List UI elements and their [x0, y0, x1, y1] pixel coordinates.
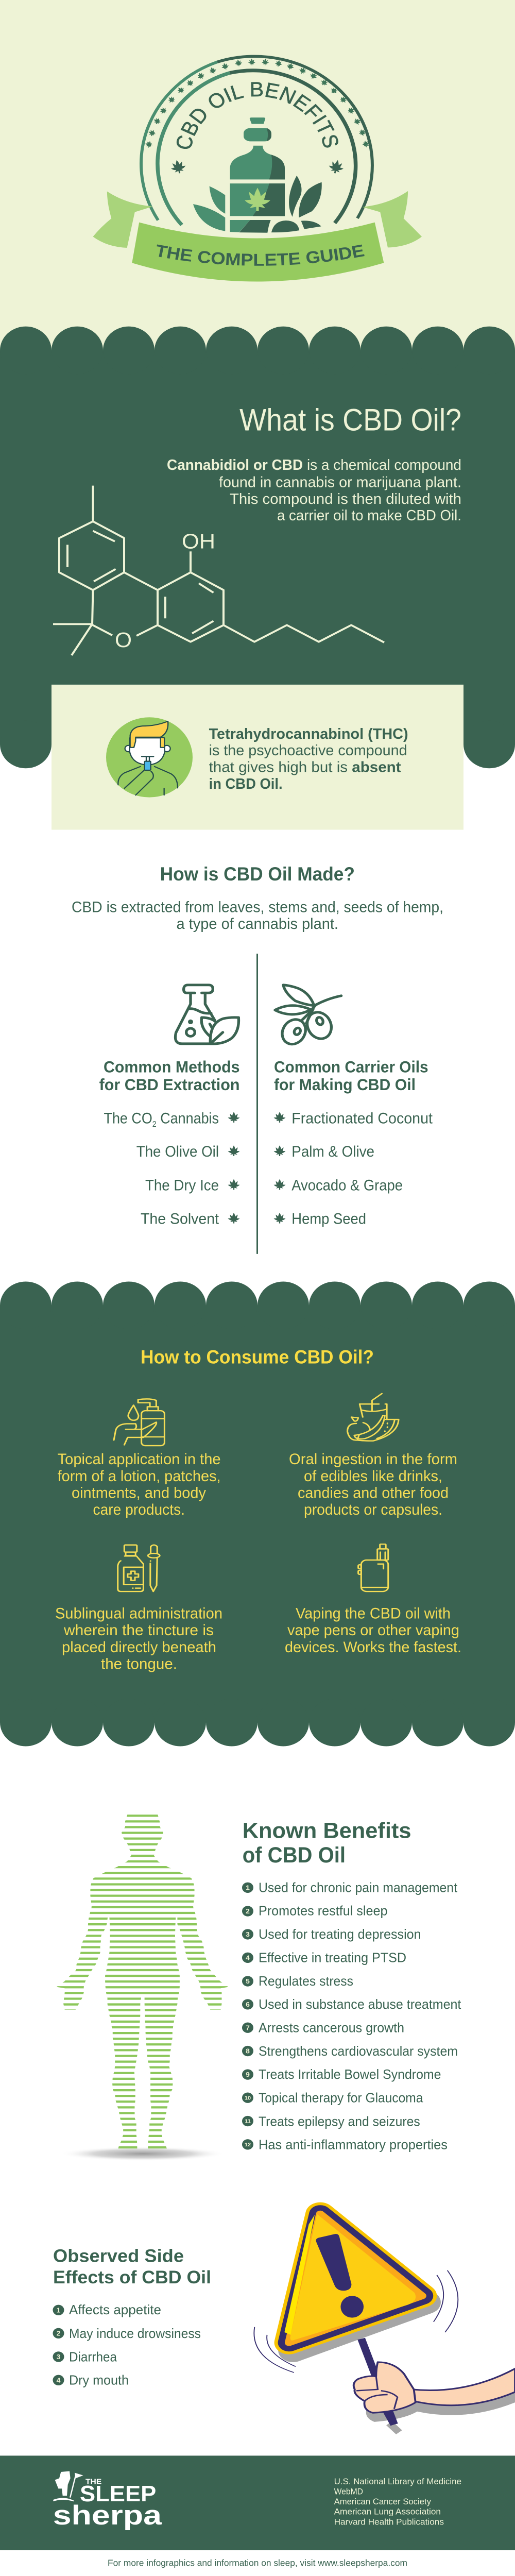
numbered benefits list: Regulates stress — [259, 1974, 353, 1989]
carrier oils column — [274, 1058, 433, 1227]
extraction methods column: The Olive Oil — [136, 1143, 219, 1160]
numbered benefits list: Used in substance abuse treatment — [259, 1997, 461, 2012]
numbered benefits list: Effective in treating PTSD — [259, 1950, 406, 1965]
icon: tincture bottle and dropper — [118, 1545, 160, 1591]
logo: The Sleep Sherpa: sherpa — [53, 2500, 162, 2530]
logo: The Sleep Sherpa: SLEEP — [80, 2481, 156, 2506]
text: vaping — [285, 1605, 461, 1656]
carrier oils column: Fractionated Coconut — [291, 1109, 433, 1127]
text: sublingual: wherein the tincture is — [63, 1621, 214, 1639]
carrier oils column: Hemp Seed — [291, 1210, 366, 1227]
ribbon text: THE COMPLETE GUIDE — [157, 244, 365, 266]
intro text: CBD is extracted from leaves, stems and, seeds of hemp, — [72, 899, 443, 916]
numbered benefits list: 12 — [245, 2142, 251, 2148]
extraction methods column: Common Methods — [104, 1058, 240, 1076]
sources: American Lung Association — [334, 2506, 441, 2517]
panel: side effects — [53, 2214, 515, 2432]
numbered benefits list: Promotes restful sleep — [259, 1903, 387, 1918]
carrier oils column: Palm & Olive — [291, 1143, 374, 1160]
intro text — [72, 899, 443, 933]
numbered side effects list — [53, 2302, 201, 2387]
intro text: a type of cannabis plant. — [176, 915, 338, 933]
ring of small leaves — [144, 58, 371, 148]
numbered benefits list: 5 — [246, 1978, 250, 1985]
numbered side effects list: 1 — [57, 2307, 61, 2314]
extraction methods column: 2 — [152, 1120, 157, 1129]
callout text — [209, 726, 408, 792]
text: oral: products or capsules. — [304, 1501, 442, 1518]
sources: American Cancer Society — [334, 2497, 431, 2506]
text: oral: candies and other food — [298, 1484, 449, 1501]
numbered benefits list: Topical therapy for Glaucoma — [259, 2090, 423, 2105]
heading — [53, 2246, 211, 2287]
text: topical: form of a lotion, patches, — [58, 1467, 221, 1485]
callout text: that gives high but is absent — [209, 759, 401, 775]
panel: what is CBD oil — [0, 327, 515, 768]
heading — [243, 1819, 411, 1868]
description: found in cannabis or marijuana plant. — [219, 474, 461, 490]
numbered benefits list: 1 — [246, 1884, 250, 1891]
scalloped green background — [0, 1282, 515, 1746]
numbered benefits list: Has anti-inflammatory properties — [259, 2137, 448, 2152]
description: Cannabidiol or CBD is a chemical compound — [167, 457, 461, 473]
sources: Harvard Health Publications — [334, 2517, 444, 2527]
icon: olive branch — [275, 985, 341, 1048]
icon: hiker — [53, 2471, 83, 2501]
extraction methods column: The Dry Ice — [145, 1176, 219, 1194]
heading: How is CBD Oil Made? — [160, 864, 355, 885]
numbered benefits list: Treats epilepsy and seizures — [259, 2114, 420, 2129]
numbered side effects list: 2 — [57, 2330, 60, 2337]
heading: How to Consume CBD Oil? — [141, 1347, 374, 1368]
heading: Observed Side — [53, 2246, 184, 2266]
molecule diagram — [53, 486, 384, 655]
carrier oils column: Common Carrier Oils — [274, 1058, 428, 1076]
description: This compound is then diluted with — [230, 491, 461, 507]
text: topical: ointments, and body — [72, 1484, 207, 1501]
heading: Known Benefits — [243, 1819, 411, 1843]
heading: What is CBD Oil? — [239, 403, 461, 437]
text: oral: of edibles like drinks, — [304, 1467, 442, 1485]
numbered benefits list: 8 — [246, 2047, 250, 2055]
bottle and leaves — [193, 117, 322, 233]
illustration: warning sign held by hand — [254, 2214, 515, 2432]
sources: WebMD — [334, 2486, 363, 2496]
text: vaping: vape pens or other vaping — [287, 1621, 459, 1639]
ribbon tails — [93, 191, 422, 248]
carrier oils column: Avocado & Grape — [291, 1176, 403, 1194]
scalloped green background — [0, 327, 515, 768]
text: vaping: devices. Works the fastest. — [285, 1638, 461, 1656]
logo: The Sleep Sherpa — [53, 2471, 162, 2530]
sources: U.S. National Library of Medicine — [334, 2477, 461, 2486]
shadows — [293, 2221, 515, 2432]
text: sublingual: Sublingual administration — [55, 1605, 222, 1622]
extraction methods column: Cannabis — [157, 1109, 219, 1127]
pole — [362, 2338, 394, 2425]
text: sublingual: the tongue. — [101, 1655, 177, 1672]
text: sublingual — [55, 1605, 222, 1672]
numbered benefits list: 3 — [246, 1930, 250, 1938]
numbered benefits list: 2 — [246, 1908, 250, 1915]
extraction methods column: for CBD Extraction — [99, 1075, 239, 1094]
text: oral — [289, 1450, 457, 1518]
ribbon — [132, 223, 384, 282]
heading: of CBD Oil — [243, 1843, 346, 1868]
numbered benefits list: 4 — [246, 1954, 250, 1961]
curved title: CBD OIL BENEFITS — [176, 82, 338, 149]
text: oral: Oral ingestion in the form — [289, 1450, 457, 1468]
panel: THC callout — [52, 685, 464, 830]
numbered benefits list: Used for chronic pain management — [259, 1880, 457, 1895]
molecule diagram: OH — [182, 530, 215, 553]
heading: Effects of CBD Oil — [53, 2267, 211, 2287]
numbered benefits list: 9 — [246, 2071, 250, 2078]
logo: The Sleep Sherpa: THE — [85, 2478, 101, 2486]
footer band — [0, 2455, 515, 2550]
numbered benefits list — [242, 1880, 461, 2152]
numbered benefits list: 7 — [246, 2024, 250, 2031]
numbered benefits list: Treats Irritable Bowel Syndrome — [259, 2067, 441, 2082]
panel: how to consume CBD oil — [0, 1282, 515, 1746]
numbered side effects list: Dry mouth — [69, 2373, 129, 2387]
icon: lotion pump and hand — [114, 1399, 164, 1446]
numbered side effects list: 4 — [57, 2377, 61, 2384]
numbered benefits list: Arrests cancerous growth — [259, 2020, 404, 2035]
description: a carrier oil to make CBD Oil. — [277, 507, 461, 524]
numbered side effects list: Diarrhea — [69, 2349, 117, 2364]
description — [167, 457, 461, 524]
numbered side effects list: 3 — [57, 2353, 60, 2361]
emblem: CBD oil benefits badge — [93, 55, 422, 281]
panel: how is CBD oil made — [72, 864, 443, 1254]
outer ring — [141, 56, 372, 220]
arm and hand — [412, 2368, 515, 2405]
sources — [334, 2477, 461, 2527]
sign — [289, 2214, 422, 2343]
extraction methods column: The CO — [104, 1109, 161, 1127]
bottle leaf label — [245, 188, 270, 211]
text: sublingual: placed directly beneath — [62, 1638, 216, 1656]
numbered side effects list: Affects appetite — [69, 2302, 161, 2317]
text: topical: Topical application in the — [58, 1450, 221, 1468]
numbered benefits list: 11 — [245, 2119, 251, 2125]
carrier oils column: for Making CBD Oil — [274, 1075, 416, 1094]
panel: known benefits — [60, 1815, 461, 2161]
numbered benefits list: Strengthens cardiovascular system — [259, 2044, 458, 2059]
icon: vape device — [358, 1544, 388, 1591]
molecule diagram: O — [115, 629, 132, 652]
striped body figure — [60, 1815, 225, 2161]
callout text: in CBD Oil. — [209, 776, 283, 792]
footer link text: For more infographics and information on sleep, visit www.sleepsherpa.com — [108, 2557, 407, 2568]
icon: drink and fruit — [348, 1394, 399, 1441]
numbered benefits list: 10 — [245, 2095, 251, 2101]
numbered side effects list: May induce drowsiness — [69, 2326, 201, 2341]
motion lines — [254, 2270, 458, 2372]
extraction methods column: The Solvent — [141, 1210, 219, 1227]
text: topical: care products. — [93, 1501, 185, 1518]
numbered benefits list: 6 — [246, 2001, 250, 2008]
icon: person vaping — [106, 717, 193, 798]
icon: flask and leaf — [176, 985, 238, 1044]
callout text: is the psychoactive compound — [209, 742, 407, 759]
text: topical — [58, 1450, 221, 1518]
text: vaping: Vaping the CBD oil with — [296, 1605, 451, 1622]
inner ring — [158, 71, 356, 225]
numbered benefits list: Used for treating depression — [259, 1927, 421, 1942]
side leaves — [169, 159, 345, 175]
extraction methods column — [99, 1058, 240, 1227]
callout text: Tetrahydrocannabinol (THC) — [209, 726, 408, 742]
